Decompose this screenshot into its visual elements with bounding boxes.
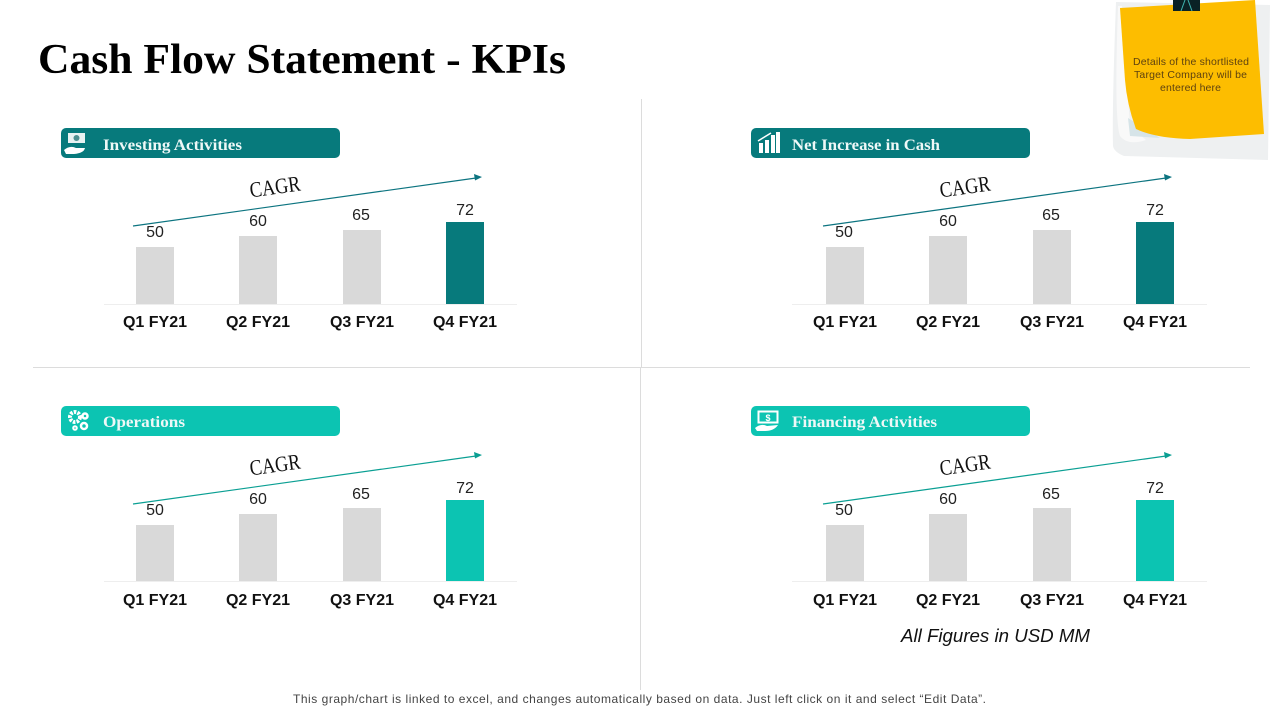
trend arrow xyxy=(823,174,1172,226)
CAGR label: CAGR xyxy=(248,449,302,481)
bar chart: Q1 FY21 xyxy=(123,314,187,331)
footer note: This graph/chart is linked to excel, and changes automatically based on data. Just left click on it and select “Edit Data”. xyxy=(293,692,986,706)
bar chart: 50 xyxy=(835,224,853,241)
CAGR label: CAGR xyxy=(248,171,302,203)
bar chart: 50 xyxy=(146,502,164,519)
bar chart: Q3 FY21 xyxy=(1020,314,1084,331)
bar chart xyxy=(104,202,517,331)
bar chart: Q3 FY21 xyxy=(1020,592,1084,609)
trend arrow xyxy=(823,452,1172,504)
bar chart: Q1 FY21 xyxy=(813,592,877,609)
units note: All Figures in USD MM xyxy=(900,625,1091,646)
bar chart xyxy=(792,480,1207,609)
bar chart: 72 xyxy=(456,202,474,219)
title: Cash Flow Statement - KPIs xyxy=(38,37,566,83)
bar chart: Q4 FY21 xyxy=(433,314,497,331)
bar chart: 72 xyxy=(456,480,474,497)
bar chart: 60 xyxy=(939,491,957,508)
sticky note inner sheet xyxy=(1116,6,1146,142)
bar chart: Q1 FY21 xyxy=(123,592,187,609)
CAGR label: CAGR xyxy=(938,171,992,203)
header bar xyxy=(751,406,1030,436)
bar chart: 50 xyxy=(835,502,853,519)
heading: Financing Activities xyxy=(792,414,937,431)
bar chart: Q4 FY21 xyxy=(1123,592,1187,609)
bar chart: 65 xyxy=(1042,486,1060,503)
icon: money on hand xyxy=(64,133,85,154)
trend arrow xyxy=(133,174,482,226)
panel: financing activities xyxy=(751,406,1207,609)
bar chart: Q4 FY21 xyxy=(433,592,497,609)
bar chart: 65 xyxy=(352,207,370,224)
bar chart: 50 xyxy=(146,224,164,241)
bar chart: Q4 FY21 xyxy=(1123,314,1187,331)
bar chart: Q3 FY21 xyxy=(330,592,394,609)
heading: Net Increase in Cash xyxy=(792,137,940,154)
bar chart: Q2 FY21 xyxy=(226,592,290,609)
icon: dollar note on hand: $ xyxy=(765,413,771,423)
sticky note curl shadow xyxy=(1128,118,1160,138)
sticky note text: Details of the shortlisted xyxy=(1133,56,1249,68)
sticky note text: entered here xyxy=(1160,82,1221,94)
heading: Operations xyxy=(103,414,185,431)
sticky note text xyxy=(1133,56,1249,94)
sticky note yellow sheet xyxy=(1120,0,1264,139)
bar chart: 65 xyxy=(1042,207,1060,224)
panel: net increase in cash xyxy=(751,128,1207,331)
header bar xyxy=(61,406,340,436)
bar chart: 60 xyxy=(249,213,267,230)
header bar xyxy=(751,128,1030,158)
bar chart: 65 xyxy=(352,486,370,503)
bar chart: 72 xyxy=(1146,202,1164,219)
icon: dollar note on hand xyxy=(755,412,778,431)
bar chart: Q2 FY21 xyxy=(916,314,980,331)
bar chart: Q1 FY21 xyxy=(813,314,877,331)
bar chart: Q3 FY21 xyxy=(330,314,394,331)
icon: gears xyxy=(70,412,88,430)
binder clip xyxy=(1173,0,1200,11)
panel: investing activities xyxy=(61,128,517,331)
header bar xyxy=(61,128,340,158)
heading: Investing Activities xyxy=(103,137,242,154)
bar chart: Q2 FY21 xyxy=(226,314,290,331)
icon: rising bar chart xyxy=(758,132,780,153)
bar chart: 60 xyxy=(939,213,957,230)
trend arrow xyxy=(133,452,482,504)
bar chart xyxy=(792,202,1207,331)
bar chart xyxy=(104,480,517,609)
sticky note text: Target Company will be xyxy=(1134,69,1247,81)
sticky note xyxy=(1113,0,1270,160)
panel: operations xyxy=(61,406,517,609)
bar chart: Q2 FY21 xyxy=(916,592,980,609)
bar chart: 60 xyxy=(249,491,267,508)
sticky note backing paper xyxy=(1113,2,1270,160)
bar chart: 72 xyxy=(1146,480,1164,497)
CAGR label: CAGR xyxy=(938,449,992,481)
